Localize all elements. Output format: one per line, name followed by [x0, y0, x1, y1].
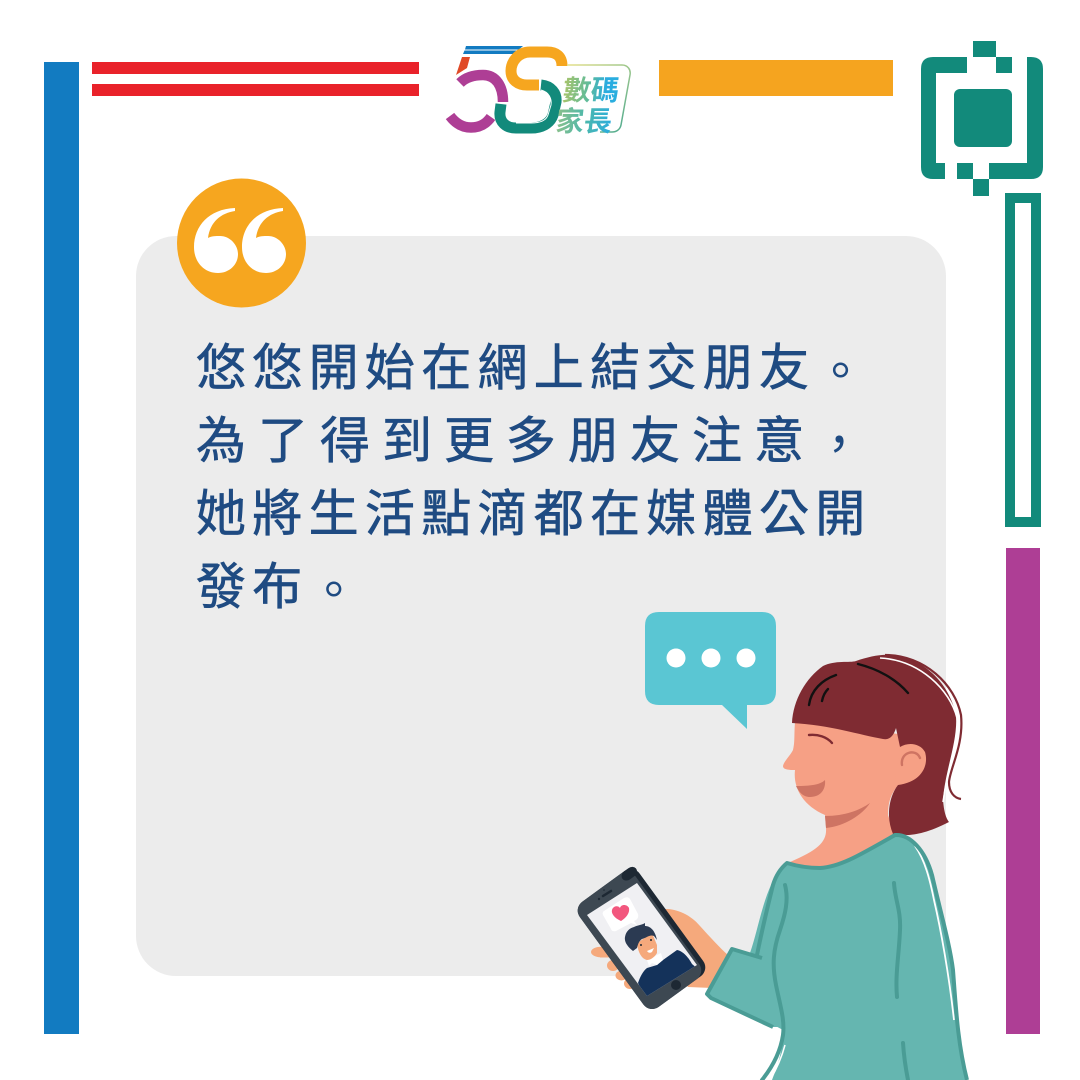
phone speaker	[598, 889, 611, 900]
woman neck shadow	[825, 803, 870, 828]
phone body	[573, 865, 710, 1013]
icon: teal pixel bracket emblem	[921, 41, 1043, 196]
bubble dots	[666, 648, 756, 668]
man hair	[625, 923, 657, 951]
man features	[640, 939, 652, 946]
logo blue stripes	[463, 46, 523, 54]
heart	[612, 905, 629, 921]
sweater fold lines	[762, 883, 908, 1080]
woman hair strand	[885, 655, 961, 799]
man collar	[647, 953, 663, 966]
text line 2: 為了得到更多朋友注意，	[196, 413, 876, 473]
text line 3: 她將生活點滴都在媒體公開	[196, 486, 872, 542]
woman sweater	[707, 835, 967, 1080]
logo outline frame	[567, 65, 630, 132]
chat bubble with heart	[603, 897, 638, 931]
woman hand and fingers	[591, 909, 728, 989]
icon: speech bubble with dots	[645, 612, 776, 729]
logo: 55 digital parents	[450, 46, 630, 137]
logo teal S lower	[500, 85, 556, 128]
logo text: jia zhang: 家長	[554, 106, 614, 137]
phone screen	[587, 883, 697, 996]
logo red flag of the five	[456, 57, 470, 75]
logo orange S upper	[511, 52, 562, 85]
panel: grey quote card	[136, 236, 946, 976]
woman hair lines	[809, 664, 908, 705]
woman face and neck	[783, 722, 908, 880]
icon: orange quotation mark badge	[177, 178, 306, 308]
illustration: woman holding phone	[573, 655, 967, 1080]
orange bar	[659, 60, 893, 96]
woman ear	[896, 744, 926, 785]
quote text	[196, 340, 876, 619]
woman eye	[809, 735, 832, 743]
logo text: shu ma: 數碼	[561, 75, 621, 106]
sweater sleeve	[707, 949, 783, 1027]
logo purple five	[450, 75, 503, 128]
man face	[638, 936, 657, 960]
woman hair highlight	[880, 658, 957, 802]
blue vertical bar	[44, 62, 79, 1034]
quote glyphs	[194, 208, 286, 273]
sweater shoulder highlight	[915, 846, 954, 1020]
red double stripes	[92, 62, 419, 96]
text line 4: 發布。	[196, 559, 365, 619]
sweater body	[750, 835, 966, 1080]
woman hair	[792, 655, 956, 835]
phone	[573, 865, 710, 1013]
teal outlined vertical bar	[1005, 193, 1041, 527]
man sweater	[638, 950, 695, 996]
phone home button	[671, 980, 681, 990]
text line 1: 悠悠開始在網上結交朋友。	[196, 340, 872, 400]
man portrait on screen	[624, 923, 695, 996]
purple vertical bar	[1006, 548, 1040, 1034]
woman mouth	[796, 780, 825, 797]
sweater outline	[757, 835, 967, 1080]
